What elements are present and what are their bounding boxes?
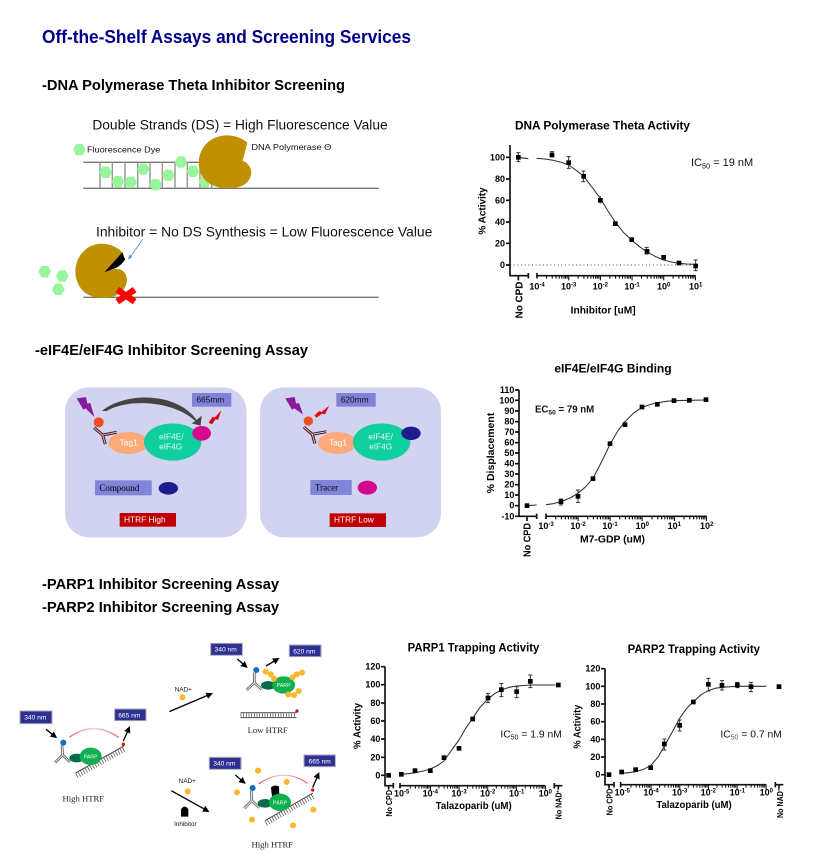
y tick labels: 60 [370, 716, 380, 726]
arrow: NAD+ and inhibitor path [171, 778, 208, 828]
fit curve [622, 686, 766, 773]
PARP enzyme: PARP [84, 754, 98, 760]
result label: HTRF low [330, 513, 386, 527]
wavelength 665 nm: 665 nm [309, 758, 331, 765]
y tick labels: 40 [370, 734, 380, 744]
y tick labels: 0 [595, 770, 600, 780]
fit curve stub [518, 157, 528, 159]
y tick labels: 80 [370, 698, 380, 708]
NAD+ label: NAD+ [179, 778, 196, 785]
single strand [83, 295, 379, 299]
arrow: emission [266, 659, 278, 666]
panel: HTRF low [260, 387, 441, 537]
x tick labels: -2 [603, 282, 609, 288]
antibody [247, 673, 262, 690]
label: High HTRF [63, 793, 104, 803]
DNA double strand [83, 162, 379, 188]
IC50 annotation: 50 [702, 161, 710, 170]
wavelength label: 620mm [341, 395, 369, 405]
EC50 annotation: 50 [548, 410, 556, 417]
NAD+ dot [185, 788, 191, 794]
DNA rungs [100, 162, 212, 188]
chart: DNA Polymerase Theta Activity [477, 118, 753, 318]
NAD+ dot [179, 694, 185, 700]
x tick labels: 10 [480, 788, 490, 798]
y tick labels: 40 [495, 217, 505, 227]
y tick labels: 120 [585, 664, 600, 674]
x tick labels: 0 [549, 789, 553, 795]
x tick labels: 10 [615, 788, 625, 798]
Tag1: Tag1 [329, 438, 347, 448]
no compound label: No CPD [522, 523, 533, 557]
free NAD+ dots [234, 768, 316, 828]
x tick labels: 10 [451, 788, 461, 798]
arrow: emission [123, 727, 129, 741]
data points [525, 397, 708, 508]
heading: DNA polymerase theta: -DNA Polymerase Theta Inhibitor Screening [42, 77, 345, 94]
x tick labels: 10 [394, 788, 404, 798]
icon: inhibitor [181, 807, 188, 817]
y tick labels: 40 [590, 734, 600, 744]
state: high HTRF with inhibitor [209, 755, 335, 849]
y tick labels: 60 [504, 438, 514, 448]
x tick labels: -1 [612, 522, 618, 528]
IC50 annotation: = 19 nM [710, 157, 753, 169]
compound bound [401, 427, 421, 440]
no NAD label: + [555, 790, 561, 792]
no NAD label: No NAD [775, 787, 785, 818]
x axis title: M7-GDP (uM) [580, 535, 645, 546]
x tick labels [394, 788, 553, 798]
x tick labels: 10 [668, 521, 678, 531]
heading: PARP2: -PARP2 Inhibitor Screening Assay [42, 599, 280, 616]
x tick labels: -4 [433, 789, 439, 795]
result label: HTRF high: HTRF High [124, 514, 166, 524]
icon: red cross [117, 290, 135, 302]
heading: eIF4E/eIF4G: -eIF4E/eIF4G Inhibitor Screening Assay [35, 342, 309, 359]
diagram: PARP HTRF trapping schematic [20, 643, 335, 849]
y tick labels: 40 [504, 459, 514, 469]
tag [258, 799, 272, 808]
x tick labels: 10 [602, 521, 612, 531]
x tick labels: 10 [529, 281, 539, 291]
IC50 annotation: IC [720, 729, 731, 740]
fit curve main [537, 158, 696, 264]
x tick labels: 10 [730, 788, 740, 798]
x tick labels: 2 [710, 522, 714, 528]
tracer bound [192, 426, 211, 441]
chart title: PARP2 Trapping Activity [628, 642, 760, 656]
bound inhibitor [271, 785, 279, 797]
icon: DNA polymerase [199, 135, 251, 188]
acceptor dot [295, 709, 299, 713]
antibody [94, 428, 117, 444]
IC50 annotation: = 0.7 nM [738, 729, 782, 740]
y axis title: % Displacement [486, 412, 497, 493]
heading: double strands: Double Strands (DS) = High Fluorescence Value [92, 117, 388, 132]
tracer key: Tracer [315, 483, 338, 493]
axes [381, 667, 562, 790]
result label: HTRF high [120, 513, 176, 527]
y tick labels: 60 [495, 195, 505, 205]
x tick labels [529, 281, 703, 291]
y tick labels [499, 385, 514, 521]
x axis title: Inhibitor [uM] [571, 305, 636, 316]
zero reference line [510, 263, 697, 266]
fit curve [400, 685, 556, 774]
no NAD label: + [777, 789, 783, 791]
error bars [662, 678, 753, 750]
donor dot [60, 740, 66, 746]
x tick labels: -2 [580, 522, 586, 528]
no compound label: No CPD [605, 789, 615, 815]
Tag1: Tag1 [120, 438, 138, 448]
wavelength 620 nm: 620 nm [293, 648, 316, 655]
PARP enzyme: PARP [277, 683, 291, 689]
heading: PARP1: -PARP1 Inhibitor Screening Assay [42, 576, 280, 593]
y tick labels: 100 [585, 681, 600, 691]
x tick labels: 10 [672, 788, 682, 798]
IC50 annotation: IC [691, 157, 702, 169]
axes [506, 145, 696, 280]
x tick labels: 10 [700, 521, 710, 531]
y tick labels: 80 [590, 699, 600, 709]
wavelength box [336, 393, 376, 407]
data points [607, 682, 781, 777]
y axis title: % Activity [573, 704, 584, 749]
IC50 annotation: = 1.9 nM [518, 729, 562, 740]
y tick labels: 90 [504, 406, 514, 416]
chart title: DNA Polymerase Theta Activity [515, 118, 690, 132]
inhibitor label: Inhibitor [174, 821, 197, 828]
icon: red emission [314, 406, 329, 418]
x axis title: Talazoparib (uM) [436, 801, 512, 812]
title: Off-the-Shelf Assays and Screening Services [42, 27, 411, 47]
energy transfer arc [259, 775, 308, 784]
wavelength 665 nm: 665 nm [118, 712, 141, 719]
x tick labels: -1 [634, 282, 640, 288]
x tick labels: -3 [682, 789, 688, 795]
Tag1 [108, 432, 148, 454]
free DNA ladder [241, 713, 297, 718]
energy transfer arc [69, 729, 119, 737]
label: DNA polymerase: DNA Polymerase Θ [251, 142, 332, 152]
eIF4E/eIF4G complex: eIF4G [369, 442, 392, 452]
error bars [559, 490, 580, 505]
fit curve stub [527, 503, 537, 507]
arrow: excitation [237, 659, 247, 667]
antibody [244, 791, 259, 808]
IC50 annotation: 50 [511, 735, 519, 742]
y tick labels: 20 [504, 480, 514, 490]
y axis title: % Activity [477, 187, 488, 235]
wavelength 340 nm: 340 nm [213, 761, 236, 768]
data points [386, 679, 561, 778]
y tick labels: 10 [504, 490, 514, 500]
y tick labels: 0 [500, 260, 505, 270]
x tick labels: 10 [657, 281, 667, 291]
y tick labels: 30 [504, 469, 514, 479]
x tick labels: 10 [701, 788, 711, 798]
tag [261, 681, 276, 690]
state: low HTRF [211, 643, 321, 735]
x tick labels: -4 [653, 789, 659, 795]
y tick labels: 60 [590, 717, 600, 727]
x tick labels: 10 [570, 521, 580, 531]
x tick labels: 10 [593, 281, 603, 291]
x axis title: Talazoparib (uM) [656, 800, 732, 811]
arrow: excitation [235, 775, 245, 783]
antibody [55, 745, 70, 763]
eIF4E/eIF4G complex: eIF4G [159, 442, 182, 452]
compound key: Compound [99, 483, 140, 493]
y tick labels: 50 [504, 448, 514, 458]
panel: HTRF high [65, 387, 247, 537]
arrow: energy transfer [102, 398, 202, 426]
wavelength 340 nm: 340 nm [215, 647, 237, 654]
icon: inhibited polymerase [75, 244, 127, 298]
no NAD label: No NAD [554, 788, 564, 819]
eIF4E/eIF4G complex: eIF4E/ [159, 431, 184, 441]
x tick labels: 10 [538, 521, 548, 531]
y tick labels: -10 [501, 511, 514, 521]
x tick labels: 10 [509, 788, 519, 798]
y tick labels: 100 [490, 152, 505, 162]
axes [601, 669, 783, 789]
arrow: to inhibitor [128, 239, 143, 260]
chart title: PARP1 Trapping Activity [408, 641, 539, 655]
acceptor dot [122, 743, 125, 746]
eIF4E/eIF4G complex [144, 423, 201, 461]
fit curve main [546, 400, 706, 505]
wavelength 340 nm: 340 nm [24, 715, 47, 722]
label: High HTRF [252, 839, 293, 849]
x tick labels: -3 [461, 789, 467, 795]
wavelength label: 665mm [196, 395, 224, 405]
y tick labels [365, 662, 380, 780]
donor dot [304, 416, 313, 426]
PAR chains [263, 669, 305, 698]
y tick labels [585, 664, 600, 780]
label: fluorescence dye: Fluorescence Dye [87, 144, 161, 154]
x tick labels: -5 [625, 789, 631, 795]
DNA ladder [76, 746, 125, 776]
label: Low HTRF [248, 725, 288, 735]
x tick labels [615, 788, 774, 798]
data points [516, 153, 698, 268]
icon: red emission [209, 410, 221, 424]
icon: fluorescence dye hexagons [73, 144, 211, 190]
x tick labels: 10 [561, 281, 571, 291]
arrow: excitation [46, 729, 56, 737]
Tag1 [318, 432, 357, 454]
tag [69, 754, 84, 762]
EC50 annotation: EC [535, 404, 548, 415]
icon: excitation lightning [77, 397, 94, 417]
y tick labels: 20 [590, 752, 600, 762]
NAD+ label: NAD+ [175, 687, 192, 694]
diagram: DNA polymerase theta assay schematic [38, 117, 432, 302]
x tick labels: 1 [678, 522, 682, 528]
x tick labels: -1 [519, 789, 525, 795]
donor dot [250, 785, 256, 791]
x tick labels: 0 [646, 522, 650, 528]
x tick labels: 10 [643, 788, 653, 798]
chart: PARP1 Trapping Activity [353, 641, 564, 819]
chart: PARP2 Trapping Activity [573, 642, 785, 818]
DNA ladder [265, 793, 314, 823]
x tick labels: 1 [699, 282, 703, 288]
no compound label: No CPD [515, 282, 526, 318]
x tick labels [538, 521, 714, 531]
eIF4E/eIF4G complex: eIF4E/ [368, 431, 394, 441]
arrow: emission [313, 773, 319, 788]
acceptor dot [311, 788, 314, 792]
x tick labels: -2 [490, 789, 496, 795]
EC50 annotation: = 79 nM [556, 404, 594, 415]
tracer key [310, 480, 377, 495]
x tick labels: 10 [624, 281, 634, 291]
chart: eIF4E/eIF4G Binding [486, 361, 714, 557]
error bars [516, 152, 698, 271]
no compound label: No CPD [384, 790, 394, 817]
wavelength box [192, 393, 231, 407]
axes [515, 390, 707, 521]
x tick labels: 10 [760, 788, 770, 798]
x tick labels: -5 [404, 789, 410, 795]
IC50 annotation: IC [500, 729, 511, 740]
IC50 annotation: 50 [731, 735, 739, 742]
arrow: NAD+ path [169, 687, 212, 712]
x tick labels: -4 [539, 282, 545, 288]
y tick labels: 20 [370, 752, 380, 762]
chart title: eIF4E/eIF4G Binding [554, 361, 672, 375]
y tick labels: 80 [495, 174, 505, 184]
donor dot [94, 417, 104, 427]
PARP enzyme: PARP [273, 800, 287, 806]
y tick labels: 70 [504, 427, 514, 437]
y tick labels: 100 [365, 680, 380, 690]
result label: HTRF low: HTRF Low [334, 515, 375, 525]
x tick labels: -1 [740, 789, 746, 795]
y tick labels: 0 [375, 770, 380, 780]
icon: free dye hexagons [38, 266, 69, 295]
error bars [486, 675, 532, 703]
antibody [304, 427, 326, 444]
y tick labels: 120 [365, 662, 380, 672]
compound key [95, 480, 178, 495]
heading: inhibitor: Inhibitor = No DS Synthesis = Low Fluorescence Value [96, 225, 432, 240]
x tick labels: 10 [423, 788, 433, 798]
y tick labels [490, 152, 505, 270]
x tick labels: 10 [636, 521, 646, 531]
icon: excitation lightning [285, 397, 303, 414]
y tick labels: 80 [504, 417, 514, 427]
x tick labels: -3 [548, 522, 554, 528]
y axis title: % Activity [353, 703, 364, 749]
x tick labels: -2 [711, 789, 717, 795]
donor dot [253, 667, 259, 673]
y tick labels: 0 [509, 501, 514, 511]
state: high HTRF without NAD [20, 709, 146, 803]
x tick labels: 10 [689, 281, 699, 291]
x tick labels: 10 [539, 788, 549, 798]
x tick labels: 0 [667, 282, 671, 288]
y tick labels: 110 [500, 385, 514, 395]
y tick labels: 20 [495, 238, 505, 248]
x tick labels: 0 [770, 789, 774, 795]
eIF4E/eIF4G complex [353, 423, 410, 461]
x tick labels: -3 [571, 282, 577, 288]
y tick labels: 100 [499, 395, 514, 405]
diagram: eIF4E/eIF4G HTRF assay panels [65, 387, 441, 537]
